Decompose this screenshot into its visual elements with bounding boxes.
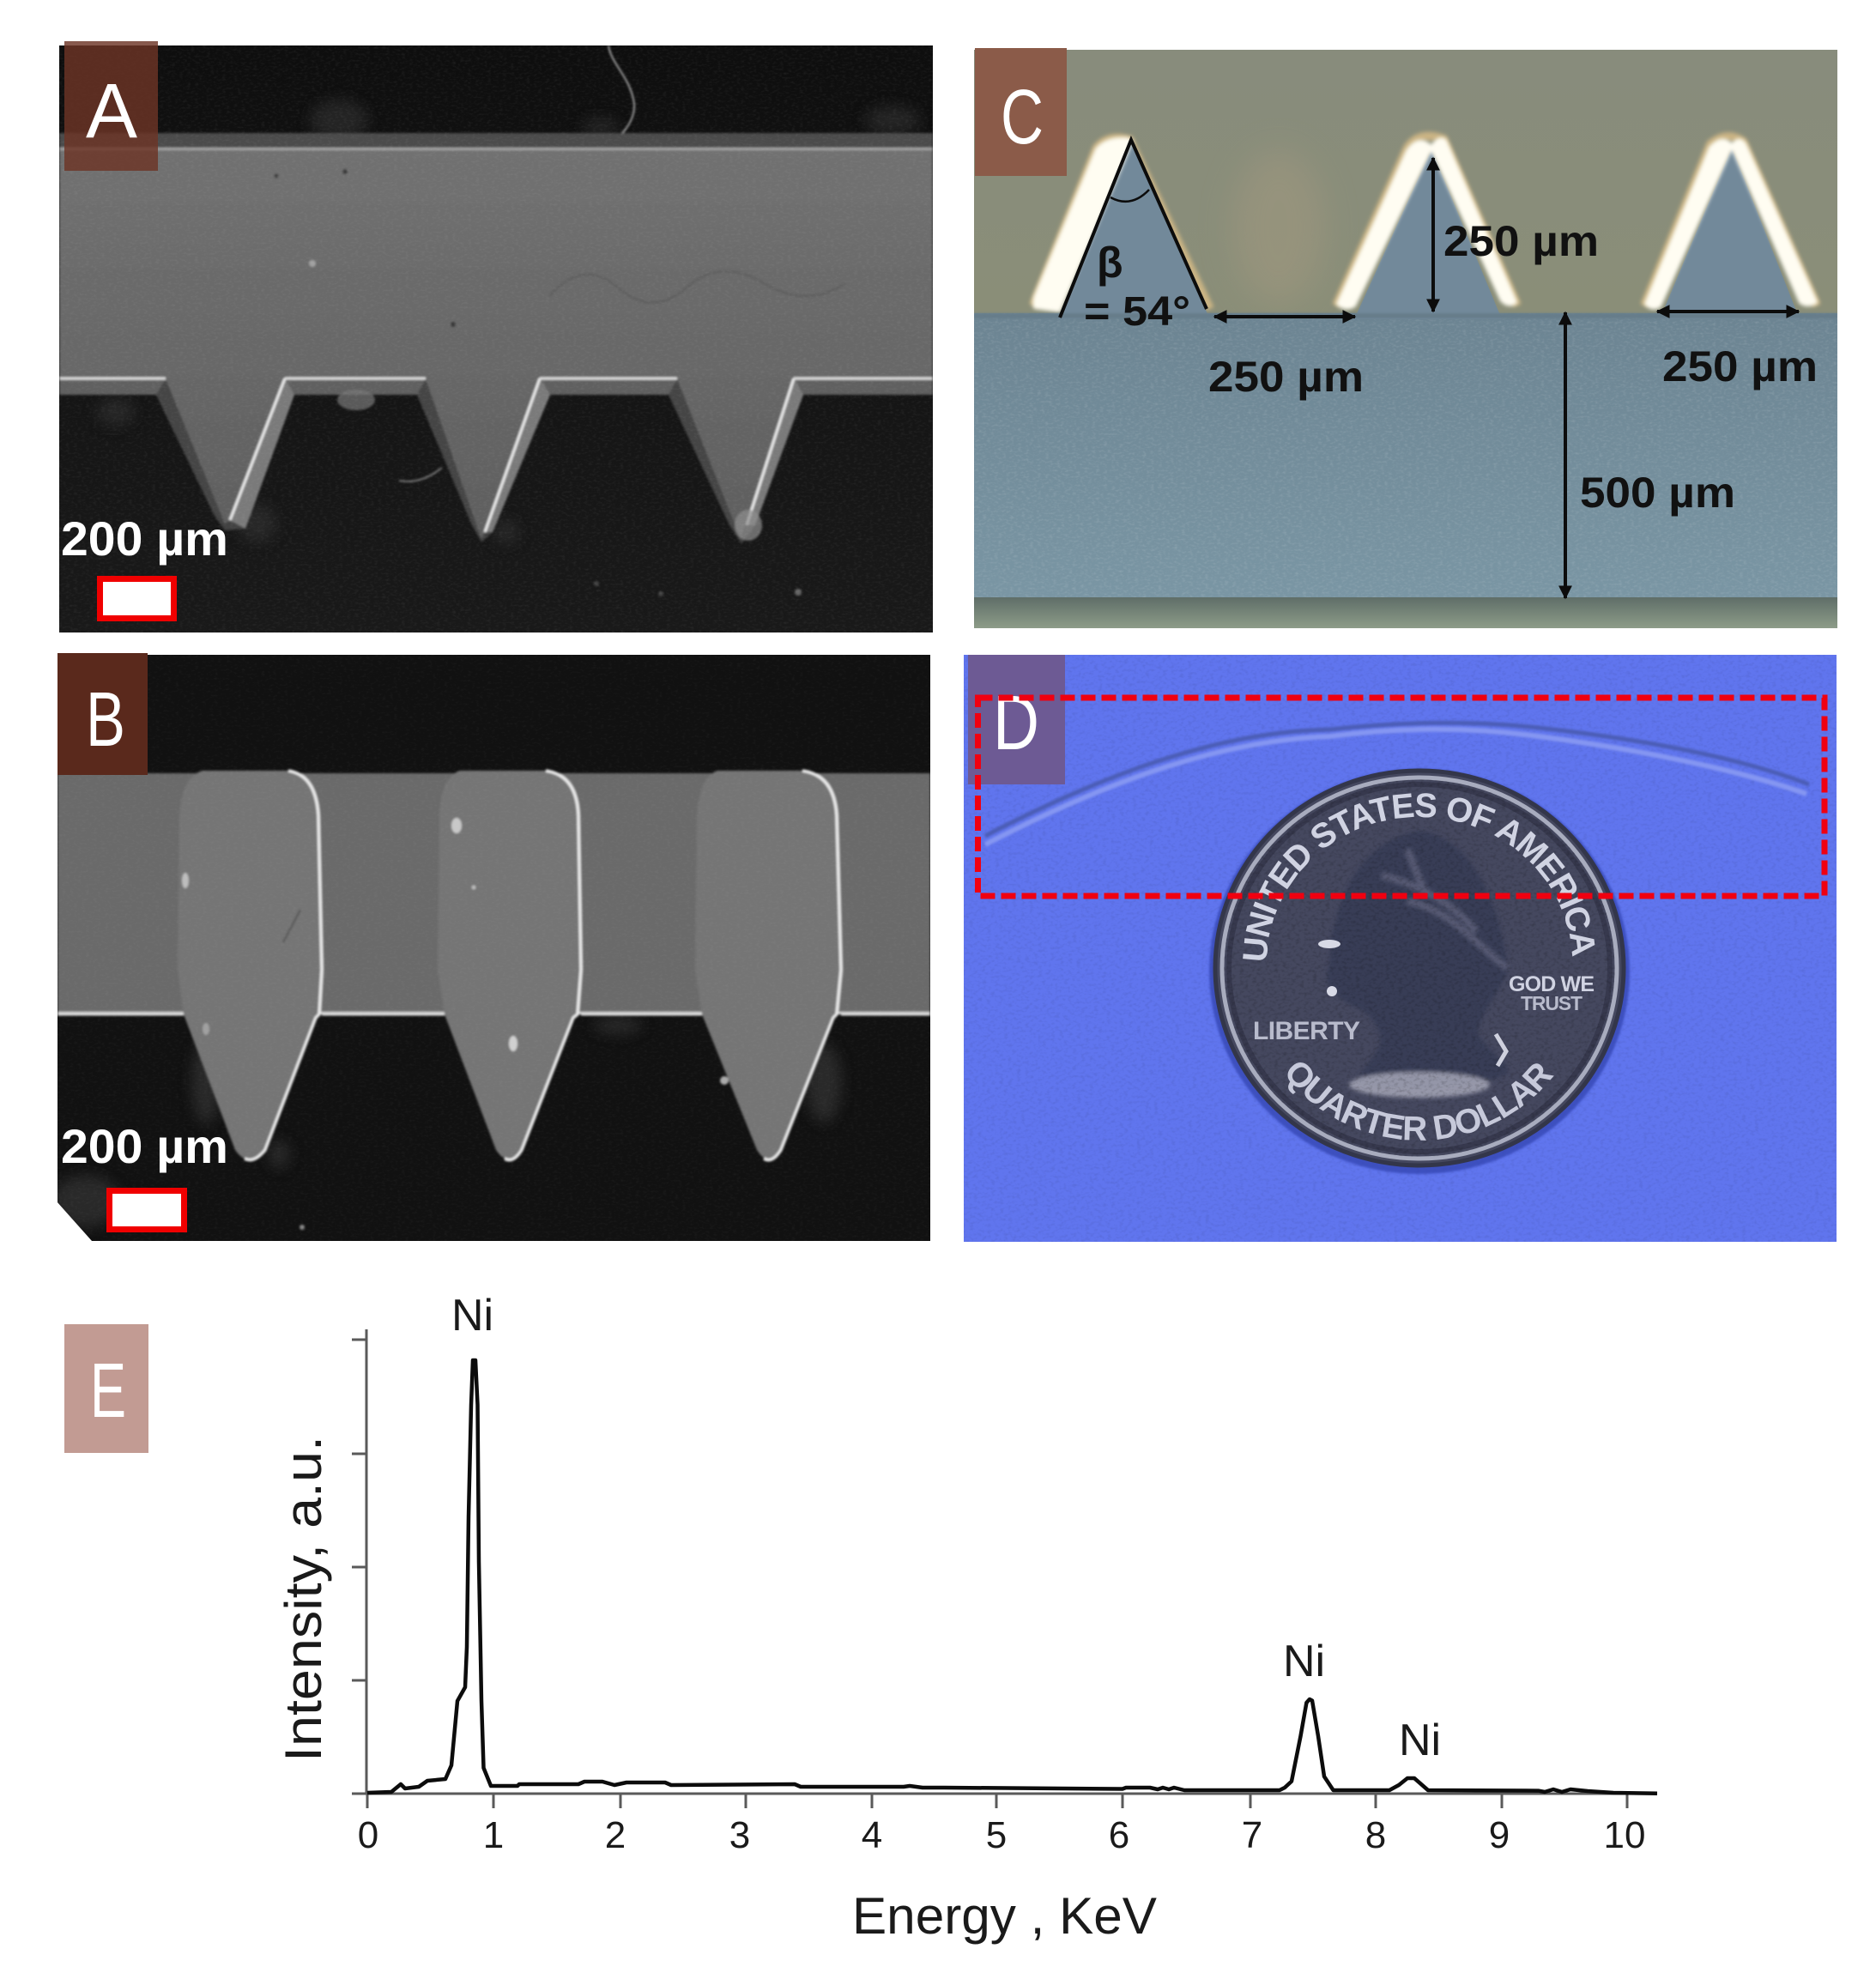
scale bar B: 200 µm [61,1119,228,1173]
angle label: β [1097,239,1123,287]
needle 2 [438,771,581,1159]
label A: A [86,69,137,154]
x tick labels: 2 [605,1814,626,1856]
x tick labels: 1 [483,1814,504,1856]
panel C: optical micrograph with dimensions [974,48,1837,628]
x tick labels: 4 [862,1814,882,1856]
peak labels: Ni [451,1291,493,1341]
angle annotation [1060,140,1207,318]
x tick labels: 10 [1604,1814,1645,1856]
label D [968,655,1065,784]
needle 1 [178,771,322,1159]
panel D: bent array next to a quarter [964,655,1837,1242]
panel A: SEM image of flat needle array [59,41,933,632]
scale bar A: 200 µm [61,511,228,566]
label D: D [993,681,1039,766]
left walls, shaded [156,380,711,476]
bust [1327,831,1509,1098]
scale bar B [61,1119,228,1229]
coin: GOD WE [1509,972,1595,996]
x tick labels: 9 [1489,1814,1510,1856]
coin lettering: UNITED STATES OF AMERICA [1243,793,1595,960]
SEM image A [59,45,933,632]
bent needle strip [985,723,1809,844]
label B [57,653,148,775]
label E [64,1324,148,1453]
central strip [57,773,930,1014]
dimension: needle gap: 250 µm [1208,353,1364,401]
panel E: EDS spectrum [64,1291,1657,1945]
coin [1208,768,1631,1175]
x tick labels: 5 [986,1814,1007,1856]
peak labels [451,1291,1441,1765]
dimension: strip width: 500 µm [1580,469,1735,517]
photo C [974,50,1837,628]
label E: E [90,1348,126,1434]
x tick labels: 3 [729,1814,750,1856]
needle body [59,148,933,539]
angle label: = 54° [1084,289,1190,335]
right walls, lit [230,378,803,532]
SEM image B [51,655,930,1241]
x axis title: Energy , KeV [852,1887,1157,1945]
x tick labels: 6 [1109,1814,1129,1856]
needle bodies [1057,140,1208,319]
coin: LIBERTY [1253,1017,1360,1045]
panel B: SEM image of bent needle array [51,653,930,1241]
angle label [1084,239,1190,335]
x tick labels: 8 [1365,1814,1386,1856]
coin: QUARTER DOLLAR [1287,1062,1554,1141]
dimension: needle height: 250 µm [1443,217,1599,265]
spectrum line [367,1360,1657,1794]
peak labels: Ni [1283,1637,1325,1686]
dashed selection box [978,698,1825,896]
y axis title: Intensity, a.u. [275,1436,332,1762]
peak labels: Ni [1399,1716,1441,1765]
bright edges [1034,139,1816,311]
x tick labels: 7 [1242,1814,1262,1856]
coin surface mottling [1224,779,1615,1157]
walls and ledges [59,378,933,544]
label B: B [86,677,125,763]
coin: TRUST [1521,992,1582,1014]
blue photo background [964,655,1837,1242]
x tick labels [358,1814,1645,1856]
axes and ticks [352,1329,1657,1808]
scale bar A [61,511,228,618]
needle 3 [695,771,841,1159]
label C: C [1001,75,1044,160]
label A [64,41,158,171]
needle glow [1033,136,1817,309]
label C [975,48,1067,176]
x tick labels: 0 [358,1814,378,1856]
dimension: needle base: 250 µm [1662,342,1818,390]
